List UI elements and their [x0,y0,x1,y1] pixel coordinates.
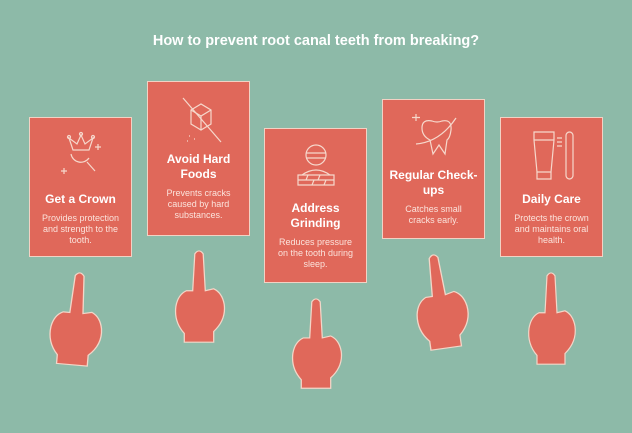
panel: address grinding: Reduces pressure on the tooth during sleep. [278,237,353,269]
icon: no hard food [182,98,222,142]
icon: grinding [297,144,335,186]
panel: get a crown [29,117,132,257]
panel: daily care: Protects the crown and maintains oral health. [514,213,589,245]
panel: avoid hard foods [147,81,250,236]
hand 4 [409,251,473,351]
panel: daily care: Daily Care [522,192,581,206]
panel: daily care [500,117,603,257]
panel: get a crown: Get a Crown [45,192,116,206]
icon: crown [61,132,101,174]
panel: address grinding: Address Grinding [290,201,340,230]
hand 5 [529,273,575,364]
panel: get a crown: Provides protection and strength to the tooth. [42,213,119,245]
hand 2 [176,251,224,342]
hand 3 [293,299,342,388]
hand 1 [47,271,107,367]
title: How to prevent root canal teeth from breaking? [153,33,479,49]
panel: avoid hard foods: Avoid Hard Foods [167,152,230,181]
icon: tooth [412,114,456,156]
panel: regular check-ups: Regular Check-ups [389,168,478,197]
panel: address grinding [264,128,367,283]
icon: toothpaste and brush [533,131,574,180]
panel: regular check-ups [382,99,485,239]
panel: regular check-ups: Catches small cracks early. [405,204,462,225]
panel: avoid hard foods: Prevents cracks caused by hard substances. [166,188,231,220]
